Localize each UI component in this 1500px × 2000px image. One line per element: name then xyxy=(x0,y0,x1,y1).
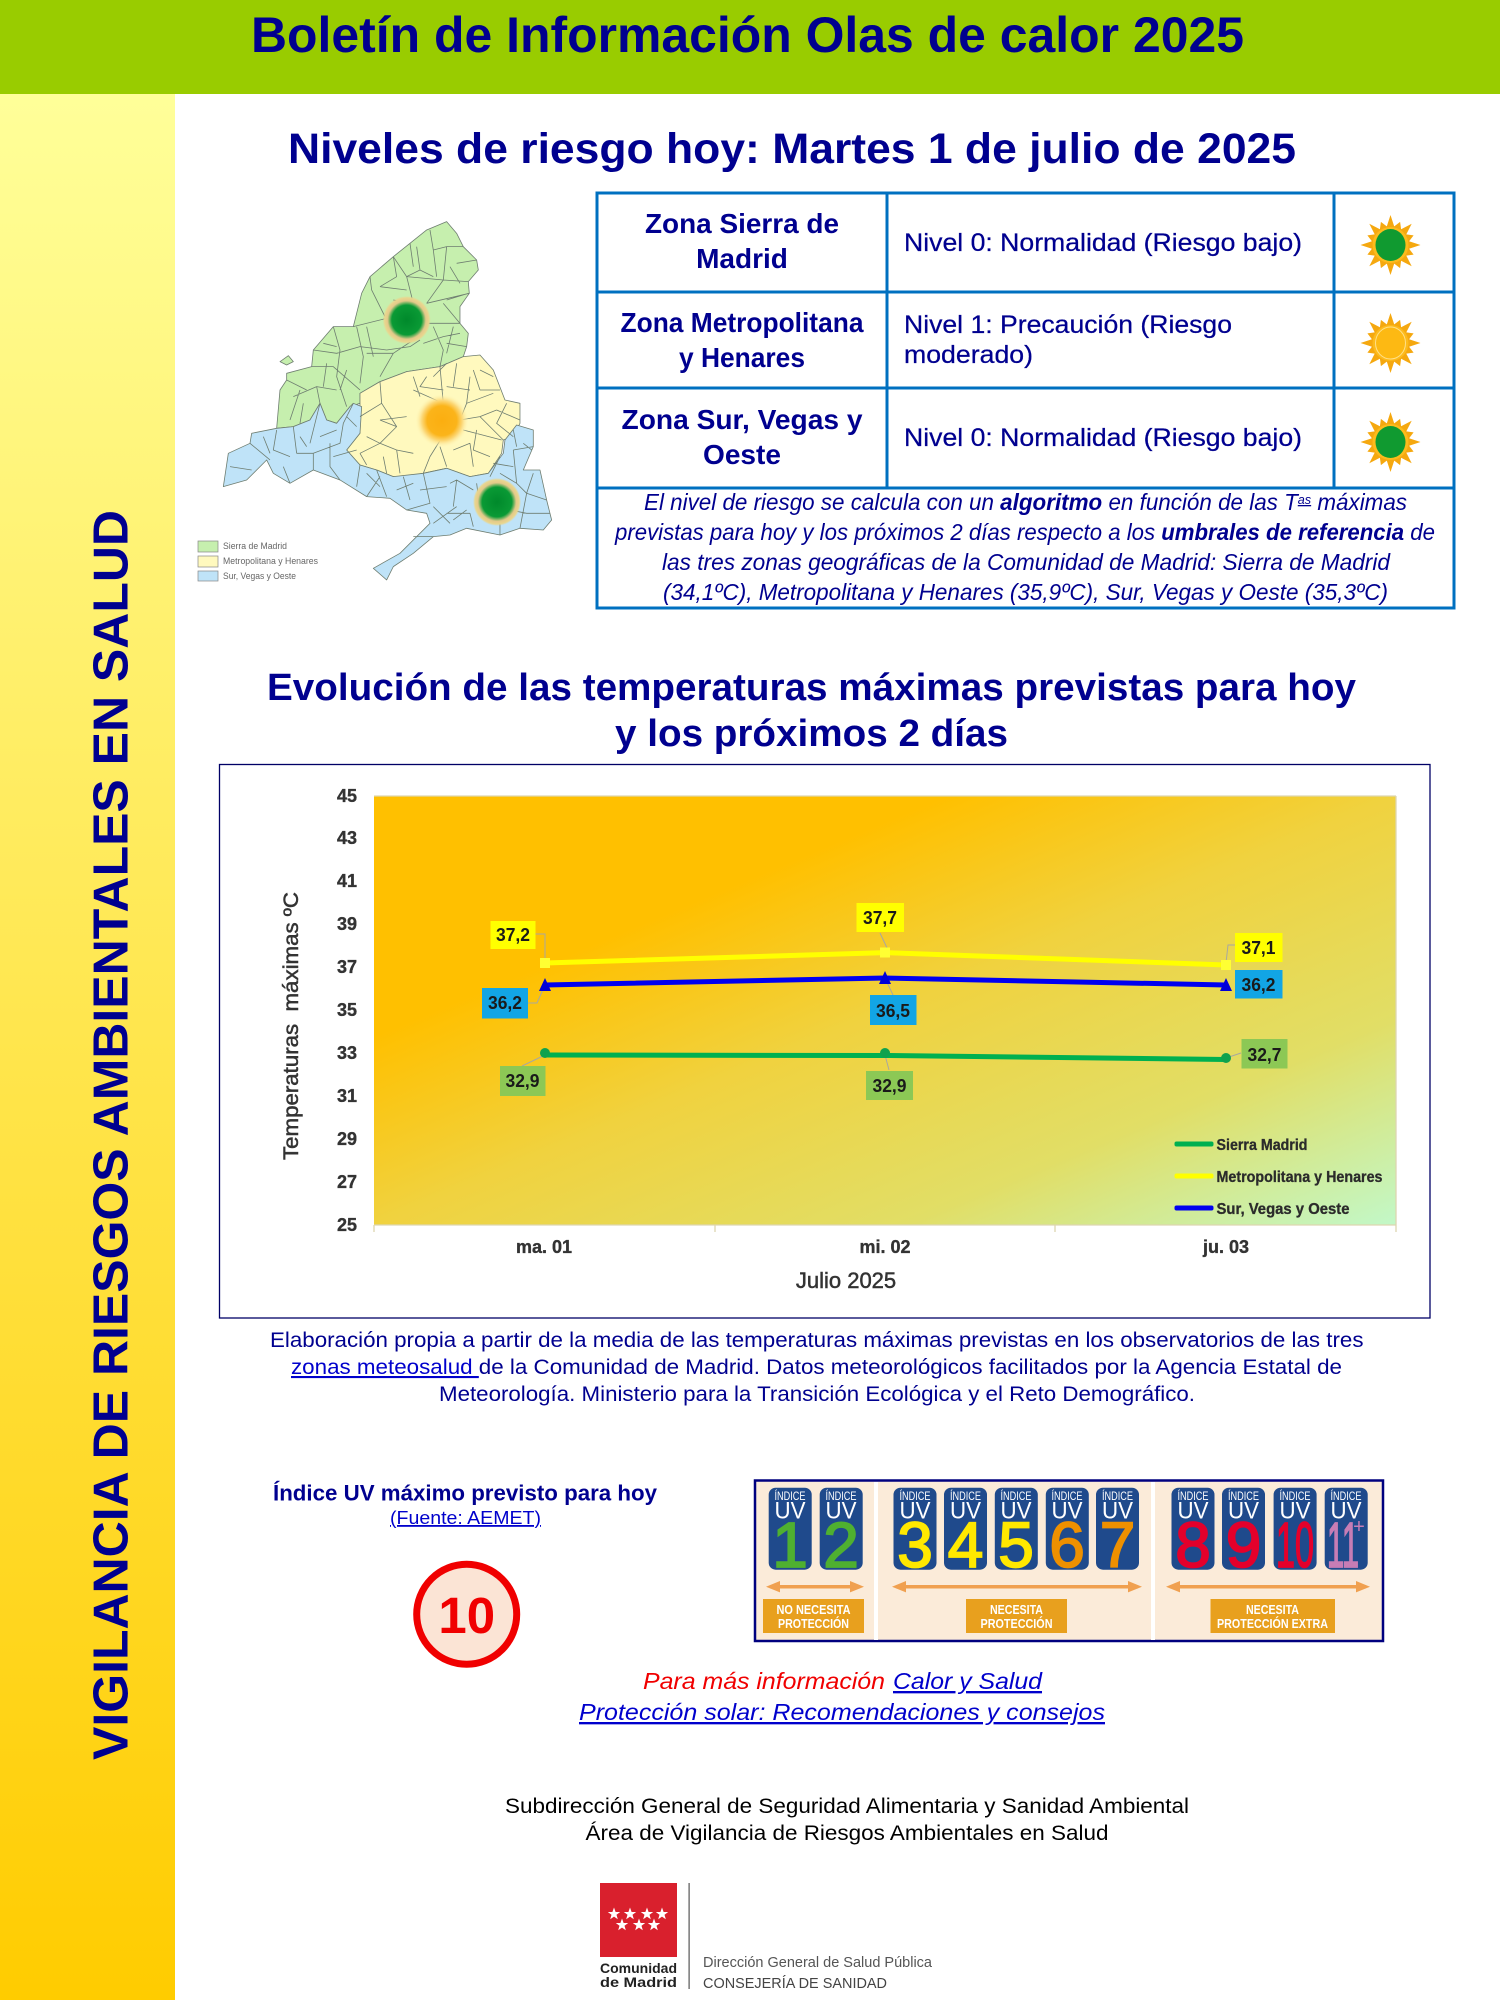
chart legend: Sierra Madrid xyxy=(1216,1137,1308,1154)
y axis labels: 27 xyxy=(337,1172,357,1192)
map legend: Metropolitana y Henares xyxy=(223,556,318,566)
UV card captions: ÍNDICE xyxy=(774,1488,806,1503)
x axis title: Julio 2025 xyxy=(796,1268,896,1293)
y axis labels: 33 xyxy=(337,1043,357,1063)
logo: Comunidad de Madrid: Comunidad xyxy=(600,1960,677,1976)
row: Sur, Vegas y Oeste: Zona Sur, Vegas y xyxy=(622,404,863,435)
chart plot area xyxy=(374,796,1396,1225)
source note xyxy=(270,1329,1364,1406)
chart legend: Sur, Vegas y Oeste xyxy=(1216,1201,1350,1218)
map legend xyxy=(198,541,318,581)
data labels xyxy=(482,903,1288,1100)
series: Sierra Madrid xyxy=(540,1048,1231,1063)
y axis labels: 37 xyxy=(337,957,357,977)
row: Sur, Vegas y Oeste: Oeste xyxy=(703,439,781,470)
more information links xyxy=(579,1668,1105,1725)
algorithm note: previstas para hoy y los próximos 2 días respecto a los umbrales de referencia de xyxy=(614,519,1435,545)
UV card UV labels: UV xyxy=(1000,1498,1032,1524)
UV card captions xyxy=(774,1488,1362,1503)
row: Metropolitana y Henares: y Henares xyxy=(679,342,805,373)
UV card captions: ÍNDICE xyxy=(1102,1488,1133,1503)
UV card UV labels: UV xyxy=(1330,1498,1362,1524)
logo: Comunidad de Madrid: Dirección General de Salud Pública xyxy=(703,1955,933,1971)
UV numbers: 10 xyxy=(1276,1509,1314,1581)
map marker: Sierra de Madrid xyxy=(383,296,431,344)
UV numbers xyxy=(772,1509,1365,1581)
source note: zonas meteosalud de la Comunidad de Madrid. Datos meteorológicos facilitados por la Agencia Estatal de xyxy=(291,1356,1342,1379)
UV numbers: + xyxy=(1353,1516,1365,1538)
chart legend: Metropolitana y Henares xyxy=(1216,1169,1382,1186)
UV protection labels: NECESITA xyxy=(990,1603,1043,1617)
map marker: Metropolitana y Henares xyxy=(415,394,469,448)
more information links: Para más información xyxy=(643,1668,885,1694)
side band vertical title: VIGILANCIA DE RIESGOS AMBIENTALES EN SALUD xyxy=(84,510,138,1760)
issuing department: Subdirección General de Seguridad Alimentaria y Sanidad Ambiental xyxy=(505,1795,1189,1818)
series: Metropolitana y Henares xyxy=(540,948,1231,970)
y axis labels: 45 xyxy=(337,786,357,806)
data labels: 37,2 xyxy=(496,925,530,945)
series: Sur, Vegas y Oeste xyxy=(539,971,1232,991)
issuing department xyxy=(505,1795,1189,1845)
UV card captions: ÍNDICE xyxy=(1330,1488,1362,1503)
logo: Comunidad de Madrid xyxy=(600,1883,933,1992)
y axis labels: 35 xyxy=(337,1000,357,1020)
data labels: 32,7 xyxy=(1248,1045,1282,1065)
leader lines xyxy=(522,933,1241,1070)
data labels: 37,1 xyxy=(1242,938,1276,958)
map legend: Sierra de Madrid xyxy=(223,541,287,551)
data labels: 36,5 xyxy=(876,1001,910,1021)
row: Metropolitana y Henares: moderado) xyxy=(904,341,1033,369)
y axis labels: 29 xyxy=(337,1129,357,1149)
row: Sierra de Madrid xyxy=(645,208,1420,275)
UV numbers: 9 xyxy=(1226,1509,1261,1581)
heading: UV index xyxy=(273,1480,657,1528)
panel: risk table xyxy=(597,193,1454,608)
UV protection labels xyxy=(763,1599,1335,1633)
y axis labels: 31 xyxy=(337,1086,357,1106)
UV numbers: 3 xyxy=(897,1509,933,1581)
panel: line chart xyxy=(220,764,1430,1318)
more information links: Protección solar: Recomendaciones y consejos xyxy=(579,1699,1105,1725)
logo: Comunidad de Madrid: de Madrid xyxy=(600,1974,677,1990)
x axis labels: mi. 02 xyxy=(859,1237,911,1257)
row: Metropolitana y Henares: Nivel 1: Precaución (Riesgo xyxy=(904,311,1232,339)
heading: temperature evolution xyxy=(267,667,1356,755)
algorithm note: as xyxy=(1298,492,1312,507)
row: Sur, Vegas y Oeste xyxy=(622,404,1420,472)
UV card UV labels xyxy=(774,1498,1362,1524)
UV card UV labels: UV xyxy=(900,1498,930,1524)
y axis labels: 43 xyxy=(337,828,357,848)
side band xyxy=(0,94,175,2000)
panel: zone map xyxy=(198,222,552,581)
UV numbers: 8 xyxy=(1175,1509,1211,1581)
algorithm note: (34,1ºC), Metropolitana y Henares (35,9ºC), Sur, Vegas y Oeste (35,3ºC) xyxy=(663,579,1388,605)
UV card UV labels: UV xyxy=(950,1498,981,1524)
UV card UV labels: UV xyxy=(1052,1498,1082,1524)
source note: Meteorología. Ministerio para la Transición Ecológica y el Reto Demográfico. xyxy=(439,1383,1195,1406)
UV index badge xyxy=(417,1564,517,1664)
issuing department: Área de Vigilancia de Riesgos Ambientales en Salud xyxy=(586,1822,1108,1845)
UV cards xyxy=(769,1488,1368,1570)
algorithm note: máximas xyxy=(1311,489,1407,515)
data labels: 37,7 xyxy=(863,908,897,928)
UV card captions: ÍNDICE xyxy=(826,1488,856,1503)
header band xyxy=(0,0,1500,94)
UV protection labels: NECESITA xyxy=(1246,1603,1299,1617)
data labels: 36,2 xyxy=(1242,975,1276,995)
UV protection labels: NO NECESITA xyxy=(776,1603,850,1617)
data labels: 36,2 xyxy=(488,993,522,1013)
row: Metropolitana y Henares: Zona Metropolitana xyxy=(620,307,864,338)
heading: temperature evolution: y los próximos 2 días xyxy=(615,713,1008,755)
title: Boletín de Información Olas de calor 2025 xyxy=(251,7,1244,63)
UV numbers: 7 xyxy=(1100,1509,1135,1581)
y axis labels: 25 xyxy=(337,1215,357,1235)
UV numbers: 11 xyxy=(1327,1509,1359,1581)
map marker: Sur, Vegas y Oeste xyxy=(473,478,521,526)
UV card captions: ÍNDICE xyxy=(1178,1488,1208,1503)
y axis title: Temperaturas máximas ºC xyxy=(280,892,303,1160)
source note: Elaboración propia a partir de la media de las temperaturas máximas previstas en los observatorios de las tres xyxy=(270,1329,1364,1352)
UV card UV labels: UV xyxy=(1228,1498,1259,1524)
UV card captions: ÍNDICE xyxy=(900,1488,930,1503)
UV card UV labels: UV xyxy=(1102,1498,1133,1524)
row: Sierra de Madrid: Madrid xyxy=(696,243,788,274)
UV numbers: 5 xyxy=(998,1509,1034,1581)
UV card captions: ÍNDICE xyxy=(1000,1488,1032,1503)
heading: UV index: Índice UV máximo previsto para hoy xyxy=(273,1480,657,1506)
UV numbers: 1 xyxy=(772,1509,808,1581)
data labels: 32,9 xyxy=(506,1071,540,1091)
UV protection labels: PROTECCIÓN xyxy=(778,1616,849,1631)
UV card captions: ÍNDICE xyxy=(1280,1488,1310,1503)
UV protection labels: PROTECCIÓN xyxy=(980,1616,1052,1631)
panel: UV scale xyxy=(755,1480,1383,1641)
UV numbers: 6 xyxy=(1049,1509,1085,1581)
UV card UV labels: UV xyxy=(774,1498,806,1524)
algorithm note xyxy=(614,489,1435,605)
x axis labels: ma. 01 xyxy=(516,1237,572,1257)
x axis labels: ju. 03 xyxy=(1202,1237,1249,1257)
logo: Comunidad de Madrid: CONSEJERÍA DE SANIDAD xyxy=(703,1975,887,1992)
data labels: 32,9 xyxy=(872,1076,906,1096)
chart legend xyxy=(1174,1137,1382,1218)
algorithm note: las tres zonas geográficas de la Comunidad de Madrid: Sierra de Madrid xyxy=(662,549,1391,575)
heading: risk levels: Niveles de riesgo hoy: Martes 1 de julio de 2025 xyxy=(288,125,1296,173)
UV card captions: ÍNDICE xyxy=(1052,1488,1082,1503)
map regions xyxy=(223,222,552,580)
row: Sur, Vegas y Oeste: Nivel 0: Normalidad (Riesgo bajo) xyxy=(904,424,1302,452)
UV card captions: ÍNDICE xyxy=(950,1488,981,1503)
row: Sierra de Madrid: Zona Sierra de xyxy=(645,208,839,239)
row: Metropolitana y Henares xyxy=(620,307,1420,373)
map legend: Sur, Vegas y Oeste xyxy=(223,571,296,581)
y axis labels: 39 xyxy=(337,914,357,934)
UV card UV labels: UV xyxy=(1178,1498,1208,1524)
algorithm note: El nivel de riesgo se calcula con un algoritmo en función de las T xyxy=(644,489,1303,515)
x axis labels xyxy=(516,1237,1249,1257)
UV card UV labels: UV xyxy=(1280,1498,1310,1524)
heading: UV index: (Fuente: AEMET) xyxy=(390,1508,541,1528)
UV card captions: ÍNDICE xyxy=(1228,1488,1259,1503)
UV index badge: 10 xyxy=(438,1587,495,1644)
y axis labels xyxy=(337,786,357,1235)
UV numbers: 2 xyxy=(823,1509,859,1581)
heading: temperature evolution: Evolución de las temperaturas máximas previstas para hoy xyxy=(267,667,1356,709)
UV card UV labels: UV xyxy=(826,1498,856,1524)
UV protection labels: PROTECCIÓN EXTRA xyxy=(1217,1616,1328,1631)
more information links: Calor y Salud xyxy=(893,1668,1043,1694)
row: Sierra de Madrid: Nivel 0: Normalidad (Riesgo bajo) xyxy=(904,229,1302,257)
y axis labels: 41 xyxy=(337,871,357,891)
UV numbers: 4 xyxy=(948,1509,983,1581)
UV arrows xyxy=(766,1581,1370,1592)
